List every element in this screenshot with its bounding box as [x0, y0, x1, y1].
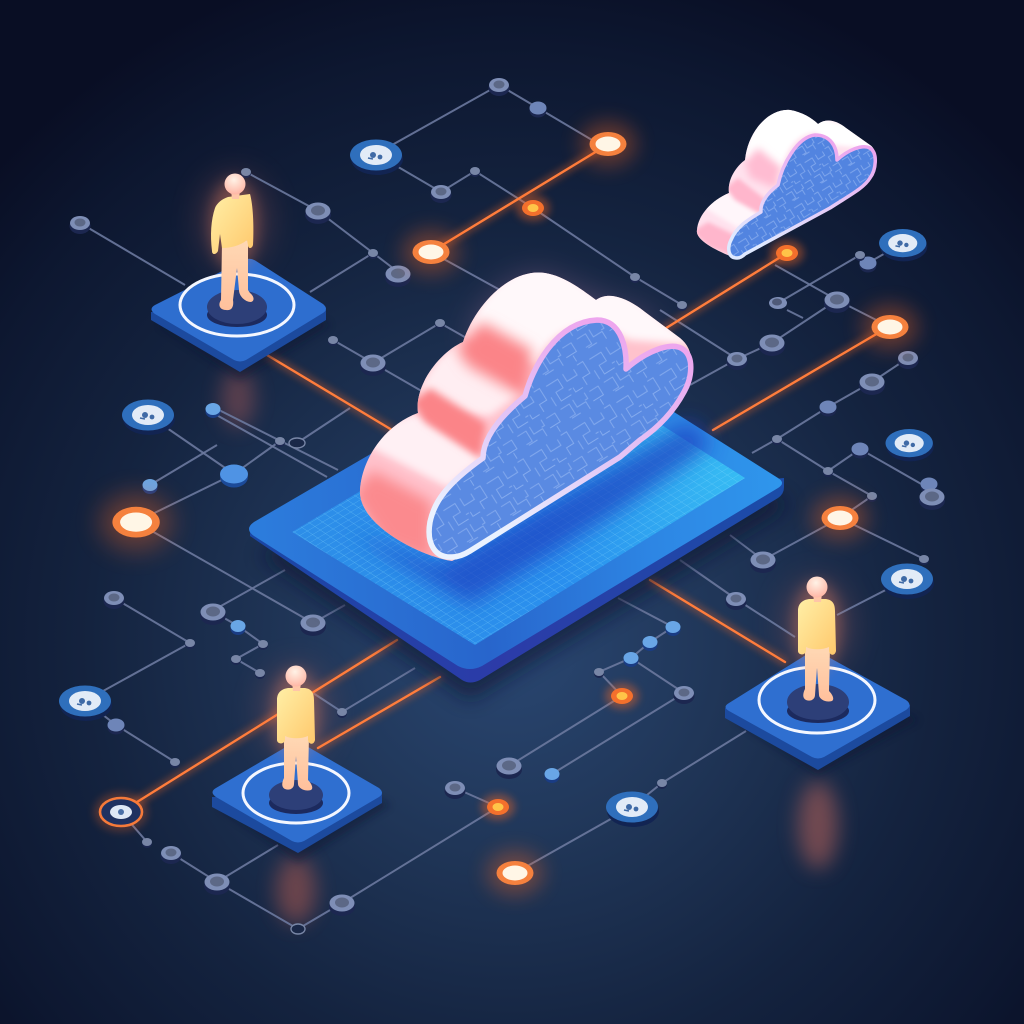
grey network nodes	[70, 78, 945, 934]
cloud extruded body	[352, 266, 695, 566]
small cloud face with maze texture	[729, 135, 875, 258]
small cloud body	[692, 106, 880, 259]
glow reflections under and around users	[201, 174, 851, 924]
central circuit platform	[249, 344, 790, 700]
icon badge nodes	[59, 140, 934, 827]
user platform: bottom left	[212, 666, 390, 862]
cloud front face with maze texture	[429, 320, 691, 557]
blue accent nodes	[142, 403, 680, 783]
glowing orange nodes	[94, 122, 918, 895]
small floating cloud	[692, 106, 880, 259]
user platform: bottom right	[725, 576, 918, 775]
user platform: top left	[151, 174, 330, 380]
grey circuit connection lines	[80, 85, 924, 929]
cloud pink halo	[470, 274, 660, 380]
inner glowing circuit panel	[292, 366, 745, 645]
large cloud	[352, 266, 695, 566]
orange highlighted connection lines	[121, 145, 890, 812]
